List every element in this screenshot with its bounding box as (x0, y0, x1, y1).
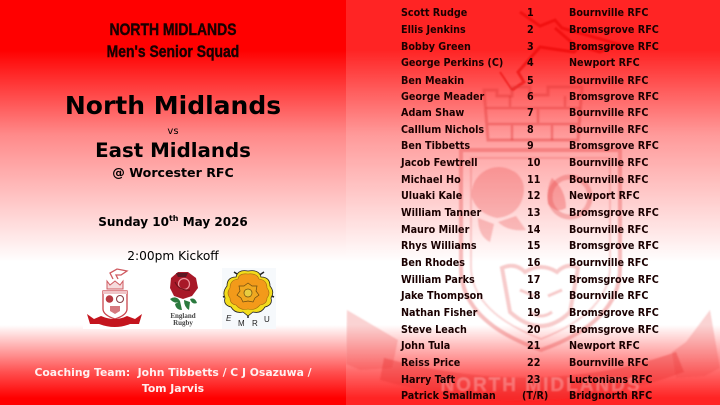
row 21: John Tula (401, 339, 450, 352)
row 4: 4 (527, 56, 534, 69)
row 6: George Meader (401, 90, 484, 103)
heading: East Midlands: East Midlands (95, 139, 251, 162)
row 17: William Parks (401, 273, 475, 286)
row 21: 21 (527, 339, 540, 352)
row 3: Bobby Green (401, 40, 471, 53)
icon: EMRU rose: M (238, 319, 245, 328)
row 16: 16 (527, 256, 540, 269)
row 15: Bromsgrove RFC (569, 239, 659, 252)
row 9: Ben Tibbetts (401, 139, 470, 152)
row 8: Calllum Nichols (401, 123, 484, 136)
icon: North Midlands crest (87, 268, 142, 327)
icon: EMRU rose: U (264, 315, 270, 324)
row 1: 1 (527, 6, 534, 19)
text: coaching team (34, 366, 312, 395)
heading: North Midlands: North Midlands (65, 91, 281, 120)
row 21: Newport RFC (569, 339, 640, 352)
row 11: Bournville RFC (569, 173, 648, 186)
text: coaching team: Coaching Team: John Tibbetts / C J Osazuwa / (34, 366, 312, 379)
row 6: Bromsgrove RFC (569, 90, 659, 103)
heading: squad title: Men's Senior Squad (107, 42, 239, 61)
row 8: Bournville RFC (569, 123, 648, 136)
icon: EMRU rose: E (226, 314, 232, 323)
row 22: Reiss Price (401, 356, 460, 369)
row 18: Jake Thompson (401, 289, 483, 302)
row 3: Bromsgrove RFC (569, 40, 659, 53)
logos: white backing strip (83, 268, 276, 329)
text: vs: vs (167, 126, 179, 137)
row 24: Patrick Smallman (401, 389, 496, 402)
row 24: Bridgnorth RFC (569, 389, 652, 402)
panel: right squad list background (346, 0, 720, 405)
row 4: George Perkins (C) (401, 56, 503, 69)
row 17: 17 (527, 273, 540, 286)
row 13: Bromsgrove RFC (569, 206, 659, 219)
row 16: Ben Rhodes (401, 256, 465, 269)
icon: England Rugby rose: Rugby (173, 319, 193, 327)
row 9: Bromsgrove RFC (569, 139, 659, 152)
row 15: Rhys Williams (401, 239, 477, 252)
row 19: Nathan Fisher (401, 306, 477, 319)
row 23: Harry Taft (401, 373, 455, 386)
row 12: Uluaki Kale (401, 189, 462, 202)
row 5: Bournville RFC (569, 74, 648, 87)
row 9: 9 (527, 139, 534, 152)
row 20: Bromsgrove RFC (569, 323, 659, 336)
row 23: 23 (527, 373, 540, 386)
row 14: Mauro Miller (401, 223, 469, 236)
row 12: 12 (527, 189, 540, 202)
row 20: Steve Leach (401, 323, 467, 336)
row 4: Newport RFC (569, 56, 640, 69)
row 11: 11 (527, 173, 540, 186)
icon: EMRU rose (222, 268, 276, 329)
row 5: Ben Meakin (401, 74, 464, 87)
row 7: Adam Shaw (401, 106, 464, 119)
text: venue: @ Worcester RFC (112, 165, 234, 180)
row 10: 10 (527, 156, 540, 169)
text: kickoff time: 2:00pm Kickoff (127, 249, 219, 263)
row 19: Bromsgrove RFC (569, 306, 659, 319)
panel: left match details background (0, 0, 346, 405)
row 6: 6 (527, 90, 534, 103)
row 11: Michael Ho (401, 173, 461, 186)
row 13: 13 (527, 206, 540, 219)
row 19: 19 (527, 306, 540, 319)
icon: England Rugby rose: England (170, 312, 196, 320)
icon: England Rugby rose (170, 272, 198, 327)
row 1: Bournville RFC (569, 6, 648, 19)
row 13: William Tanner (401, 206, 481, 219)
text: match date: Sunday 10th May 2026 (98, 214, 248, 229)
row 12: Newport RFC (569, 189, 640, 202)
row 20: 20 (527, 323, 540, 336)
row 22: Bournville RFC (569, 356, 648, 369)
row 14: Bournville RFC (569, 223, 648, 236)
row 7: 7 (527, 106, 534, 119)
row 1: Scott Rudge (401, 6, 467, 19)
row 7: Bournville RFC (569, 106, 648, 119)
text: coaching team: Tom Jarvis (142, 382, 204, 395)
icon: EMRU rose: R (252, 319, 258, 328)
heading: squad title: NORTH MIDLANDS (109, 20, 236, 39)
row 17: Bromsgrove RFC (569, 273, 659, 286)
row 18: 18 (527, 289, 540, 302)
watermark crest: NORTH MIDLANDS (440, 375, 642, 396)
row 8: 8 (527, 123, 534, 136)
row 3: 3 (527, 40, 534, 53)
row 2: Ellis Jenkins (401, 23, 466, 36)
row 10: Jacob Fewtrell (401, 156, 478, 169)
row 16: Bournville RFC (569, 256, 648, 269)
row 15: 15 (527, 239, 540, 252)
row 10: Bournville RFC (569, 156, 648, 169)
row 22: 22 (527, 356, 540, 369)
heading: squad title (107, 20, 239, 61)
row 23: Luctonians RFC (569, 373, 652, 386)
row 24: (T/R) (522, 389, 548, 402)
watermark crest (346, 11, 720, 400)
row 14: 14 (527, 223, 540, 236)
row 2: 2 (527, 23, 534, 36)
row 2: Bromsgrove RFC (569, 23, 659, 36)
row 5: 5 (527, 74, 534, 87)
row 18: Bournville RFC (569, 289, 648, 302)
